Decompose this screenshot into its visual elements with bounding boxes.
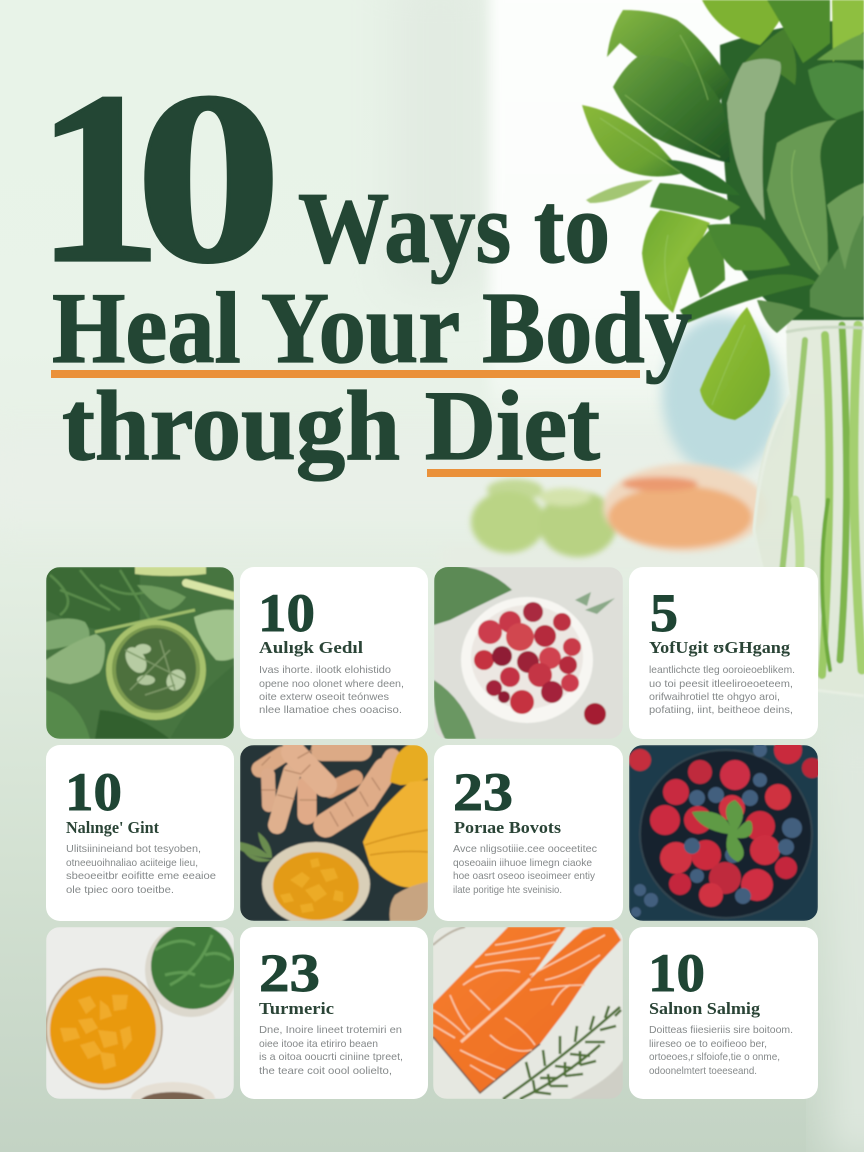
- leaf F bright: [642, 210, 710, 313]
- card body text: opene noo olonet where deen,: [259, 678, 404, 690]
- card body text: Dne, Inoire lineet trotemiri en: [259, 1024, 402, 1036]
- card body text: [649, 664, 795, 716]
- blurred teal vase: [662, 315, 782, 475]
- card body text: uo toi peesit itleeliroeoeteem,: [649, 678, 793, 690]
- strawberries: [629, 736, 822, 907]
- orange underline: [51, 370, 640, 378]
- card: Porıae Bovots: [434, 745, 623, 921]
- blurred green apples: [471, 479, 617, 557]
- card body text: qoseoaiin iihuoe limegn ciaoke: [453, 857, 592, 869]
- photo: salmon fillets: [433, 927, 623, 1099]
- leaf garnish: [692, 800, 752, 862]
- raspberries: [474, 602, 581, 714]
- leaf E: [650, 183, 740, 220]
- photo: leafy greens bowl: [46, 567, 234, 739]
- card body text: oiee itooe ita etiriro beaen: [259, 1038, 378, 1050]
- title line: through Diet: through Diet: [62, 370, 600, 481]
- title line: Ways to: Ways to: [298, 172, 610, 285]
- card body text: [66, 843, 216, 896]
- card heading: Porıae Bovots: [454, 818, 561, 837]
- card: Turmeric: [240, 927, 428, 1099]
- card body text: otneeuoihnaliao aciiteige lieu,: [66, 857, 198, 869]
- title number: [36, 41, 282, 313]
- leaf J: [767, 0, 830, 63]
- small herb: [240, 832, 272, 862]
- cluster by vase: [757, 300, 803, 333]
- leaf A: [607, 10, 730, 107]
- card body text: hoe oasrt oseoo iseoimeer entiy: [453, 870, 596, 882]
- leaf K bright: [700, 307, 770, 420]
- blueberries: [631, 743, 802, 917]
- card body text: Ivas ihorte. ilootk elohistido: [259, 664, 391, 676]
- white bowl: [461, 597, 593, 723]
- card body text: nlee llamatioe ches ooaciso.: [259, 704, 402, 716]
- leaf H: [767, 120, 837, 283]
- green bowl: [106, 620, 206, 720]
- photo: mixed berries bowl: [629, 736, 822, 921]
- title number: 0: [135, 42, 282, 313]
- card number: 10: [648, 943, 705, 1003]
- card number: 23: [259, 943, 320, 1003]
- card number: 5: [650, 583, 678, 643]
- turmeric bowl: [262, 842, 370, 926]
- card body text: oite exterw oseoit teónwes: [259, 691, 389, 703]
- title: [36, 41, 692, 481]
- card body text: leantlichcte tleg ooroieoeblikem.: [649, 664, 795, 676]
- orange underline short: [427, 469, 601, 477]
- blurred plate of food: [603, 464, 767, 552]
- ginger roots: [260, 750, 392, 826]
- turmeric bowl: [46, 969, 162, 1089]
- card body text: orifwaihrotiel tte ohgyo aroi,: [649, 691, 780, 703]
- leaf B dark: [613, 55, 730, 163]
- leaf L narrow: [680, 275, 818, 323]
- card body text: [259, 1024, 403, 1077]
- card: Aulıgk Gedıl: [240, 567, 428, 739]
- card body text: [259, 664, 404, 716]
- turmeric slices: [390, 745, 428, 785]
- card: YofUgit ʊGHgang: [629, 567, 818, 739]
- leaf D pale: [586, 180, 653, 203]
- card heading: Nalınge' Gint: [66, 818, 159, 837]
- rosemary: [503, 1006, 621, 1099]
- vase with stems: [754, 315, 864, 696]
- card body text: is a oitoa ooucrti ciniine tpreet,: [259, 1051, 403, 1063]
- card body text: ortoeoes,r slfoiofe,tie o onme,: [649, 1051, 780, 1063]
- leaf C left: [582, 105, 683, 177]
- leaf G pale: [727, 59, 781, 220]
- card body text: Avce nligsotiiie.cee ooceetitec: [453, 843, 597, 855]
- card body text: [453, 843, 597, 896]
- veins: [600, 35, 820, 405]
- card body text: liireseo oe to eoifieoo ber,: [649, 1038, 767, 1050]
- card: Salnon Salmig: [629, 927, 818, 1099]
- card body text: ole tpiec ooro toeitbe.: [66, 884, 174, 896]
- card heading: Aulıgk Gedıl: [259, 638, 363, 657]
- dark inner foliage: [720, 20, 864, 320]
- dark bowl: [640, 750, 812, 918]
- card number: 10: [258, 583, 315, 643]
- salmon stripes: [433, 930, 605, 1080]
- card number: 23: [453, 762, 513, 822]
- card: Nalınge Gint: [46, 745, 234, 921]
- card body text: ilate poritige hte sveinisio.: [453, 884, 562, 896]
- greens bowl: [145, 923, 237, 1017]
- small bowl: [131, 1082, 215, 1099]
- card heading: YofUgit ʊGHgang: [649, 638, 791, 657]
- card body text: Ulitsiinineiand bot tesyoben,: [66, 843, 201, 855]
- plant leaves: [582, 0, 864, 420]
- photo: ginger and turmeric: [240, 745, 428, 926]
- card body text: [649, 1024, 793, 1077]
- card body text: pofatiing, iint, beitheoe deins,: [649, 704, 793, 716]
- card body text: Doitteas fiiesieriis sire boitoom.: [649, 1024, 793, 1036]
- top leaves: [702, 0, 790, 45]
- card body text: sbeoeeitbr eoifitte eme eeaioe: [66, 870, 216, 882]
- salmon fillet: [433, 927, 621, 1093]
- card heading: Turmeric: [259, 999, 334, 1018]
- card number: 10: [65, 762, 122, 822]
- photo: turmeric and greens bowls: [46, 927, 234, 1099]
- photo: raspberries bowl: [434, 566, 623, 739]
- right lower: [810, 217, 864, 317]
- card heading: Salnon Salmig: [649, 999, 761, 1018]
- leaf I: [808, 62, 864, 120]
- title line: Heal Your Body: Heal Your Body: [52, 272, 692, 385]
- title number: 1: [36, 41, 162, 313]
- card body text: odoonelmtert toeeseand.: [649, 1065, 757, 1077]
- card body text: the teare coit oool oolielto,: [259, 1065, 392, 1077]
